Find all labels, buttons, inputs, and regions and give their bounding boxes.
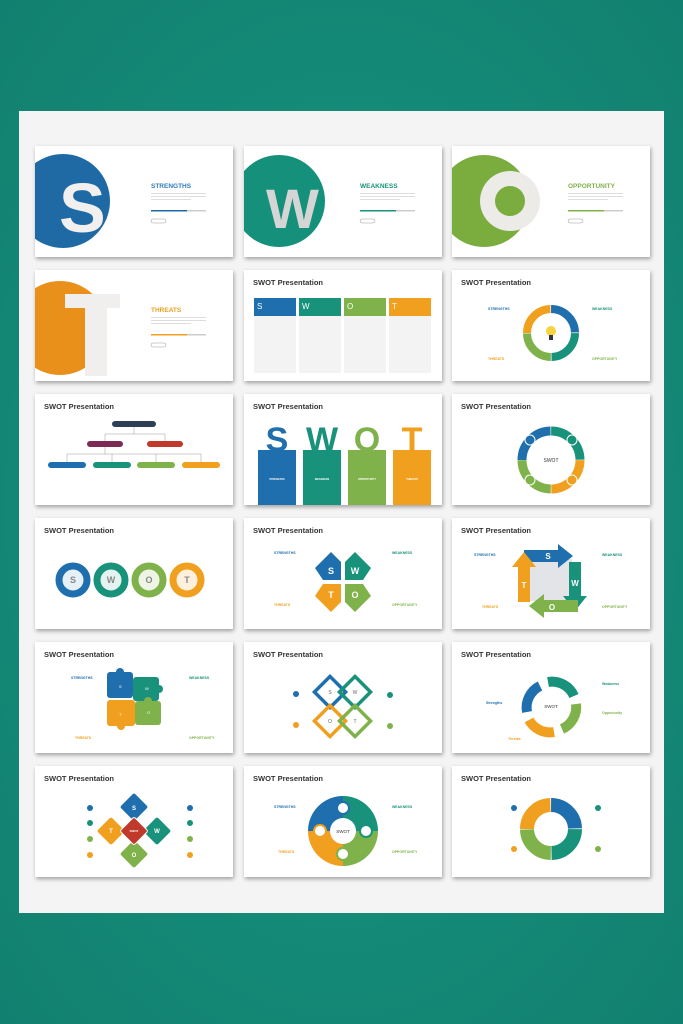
slide: ring bulb: SWOT Presentation (461, 278, 531, 287)
slide: arrow cross: T (328, 590, 334, 600)
slide: strengths (35, 146, 233, 257)
slide: wave circles: SWOT Presentation (44, 526, 114, 535)
slide: strengths: STRENGTHS (151, 183, 192, 190)
slide: org chart (35, 394, 233, 505)
slide: circle swirl (244, 766, 442, 877)
slide: arrow square: W (571, 579, 579, 588)
slide: diamond quad: SWOT (130, 829, 139, 833)
slide: arrow cross: SWOT Presentation (253, 526, 323, 535)
slide: wave circles: W (107, 575, 116, 585)
slide: ring bulb: OPPORTUNITY (592, 357, 618, 361)
slide: arrow square: T (522, 581, 527, 590)
slide: opportunity: OPPORTUNITY (568, 183, 616, 190)
slide: cycle arrows: Opportunity (602, 711, 622, 715)
slide: puzzle: S (119, 684, 122, 689)
slide: cycle arrows: SWOT Presentation (461, 650, 531, 659)
slide: SWOT letters: S (266, 421, 288, 459)
slide: wave circles: O (145, 575, 153, 585)
slide: arrow square: S (545, 552, 551, 561)
slide: diamonds: T (353, 719, 357, 725)
slide: cycle arrows: Strengths (486, 701, 502, 705)
slide: circle swirl: STRENGTHS (274, 805, 296, 809)
slide: ring final: SWOT Presentation (461, 774, 531, 783)
slide: cycle arrows (452, 642, 650, 753)
slide: circle swirl: SWOT Presentation (253, 774, 323, 783)
slide: SWOT letters: O (354, 421, 380, 459)
slide: puzzle: W (145, 686, 149, 691)
slide: puzzle: WEAKNESS (189, 676, 210, 680)
slide: threats: THREATS (151, 307, 182, 314)
slide: weakness: WEAKNESS (360, 183, 398, 190)
slide: table: S (257, 302, 262, 311)
slide: weakness: W (266, 177, 319, 240)
slide: arrow cross: W (351, 566, 360, 576)
slide: opportunity (452, 146, 650, 257)
panel: white sheet (19, 111, 664, 913)
slide: circle swirl: OPPORTUNITY (392, 850, 418, 854)
slide: SWOT letters: SWOT Presentation (253, 402, 323, 411)
slide: threats (35, 270, 233, 381)
slide: puzzle: O (147, 710, 150, 715)
slide: cycle arrows: Threats (508, 737, 521, 741)
slide: arrow square (452, 518, 650, 629)
slide: diamond quad: O (132, 853, 137, 859)
slide: diamonds: SWOT Presentation (253, 650, 323, 659)
slide: arrow cross: S (328, 566, 334, 576)
slide: ring bulb: THREATS (488, 357, 505, 361)
slide: arrow cross: O (351, 590, 359, 600)
slide: puzzle: THREATS (75, 736, 92, 740)
slide: SWOT ring: SWOT Presentation (461, 402, 531, 411)
slide: ring bulb: STRENGTHS (488, 307, 510, 311)
slide: SWOT letters (244, 394, 442, 505)
slide: ring bulb (452, 270, 650, 381)
slide: diamond quad: SWOT Presentation (44, 774, 114, 783)
slide: SWOT letters: WEAKNESS (315, 478, 330, 481)
slide: table (244, 270, 442, 381)
slide: SWOT letters: OPPORTUNITY (358, 478, 376, 481)
slide: diamonds: S (328, 690, 332, 696)
slide: table: T (392, 302, 397, 311)
slide: puzzle: T (119, 712, 122, 717)
slide: arrow square: OPPORTUNITY (602, 605, 628, 609)
slide: org chart: SWOT Presentation (44, 402, 114, 411)
slide: arrow square: THREATS (482, 605, 499, 609)
slide: weakness (244, 146, 442, 257)
slide: arrow cross: OPPORTUNITY (392, 603, 418, 607)
slide: wave circles (35, 518, 233, 629)
slide: SWOT letters: W (306, 421, 339, 459)
slide: circle swirl: THREATS (278, 850, 295, 854)
slide: arrow cross: WEAKNESS (392, 551, 413, 555)
slide: cycle arrows: SWOT (544, 704, 558, 709)
slide: arrow cross (244, 518, 442, 629)
slide: SWOT letters: STRENGTHS (269, 478, 285, 481)
slide: diamond quad: T (109, 829, 113, 835)
slide: circle swirl: SWOT (336, 829, 350, 834)
slide: arrow square: STRENGTHS (474, 553, 496, 557)
slide: table: O (347, 302, 353, 311)
slide: arrow cross: THREATS (274, 603, 291, 607)
slide: cycle arrows: Weakness (602, 682, 619, 686)
slide: puzzle: STRENGTHS (71, 676, 93, 680)
slide: wave circles: S (70, 575, 76, 585)
slide: arrow cross: STRENGTHS (274, 551, 296, 555)
slide: strengths: S (59, 169, 106, 247)
slide: wave circles: T (184, 575, 190, 585)
slide: puzzle (35, 642, 233, 753)
slide: puzzle: SWOT Presentation (44, 650, 114, 659)
slide: diamonds (244, 642, 442, 753)
slide: SWOT letters: THREATS (406, 478, 418, 481)
slide: diamonds: W (353, 690, 358, 696)
slide: arrow square: O (549, 603, 555, 612)
slide: SWOT ring (452, 394, 650, 505)
slide: ring final (452, 766, 650, 877)
slide: SWOT ring: SWOT (544, 458, 558, 464)
slide: arrow square: SWOT Presentation (461, 526, 531, 535)
slide: SWOT letters: T (402, 421, 423, 459)
slide: circle swirl: WEAKNESS (392, 805, 413, 809)
slide: diamonds: O (328, 719, 332, 725)
slide: puzzle: OPPORTUNITY (189, 736, 215, 740)
slide: ring bulb: WEAKNESS (592, 307, 613, 311)
slide: diamond quad (35, 766, 233, 877)
slide: table: W (302, 302, 310, 311)
slide: table: SWOT Presentation (253, 278, 323, 287)
slide: diamond quad: S (132, 806, 136, 812)
slide: diamond quad: W (154, 829, 160, 835)
slide: arrow square: WEAKNESS (602, 553, 623, 557)
